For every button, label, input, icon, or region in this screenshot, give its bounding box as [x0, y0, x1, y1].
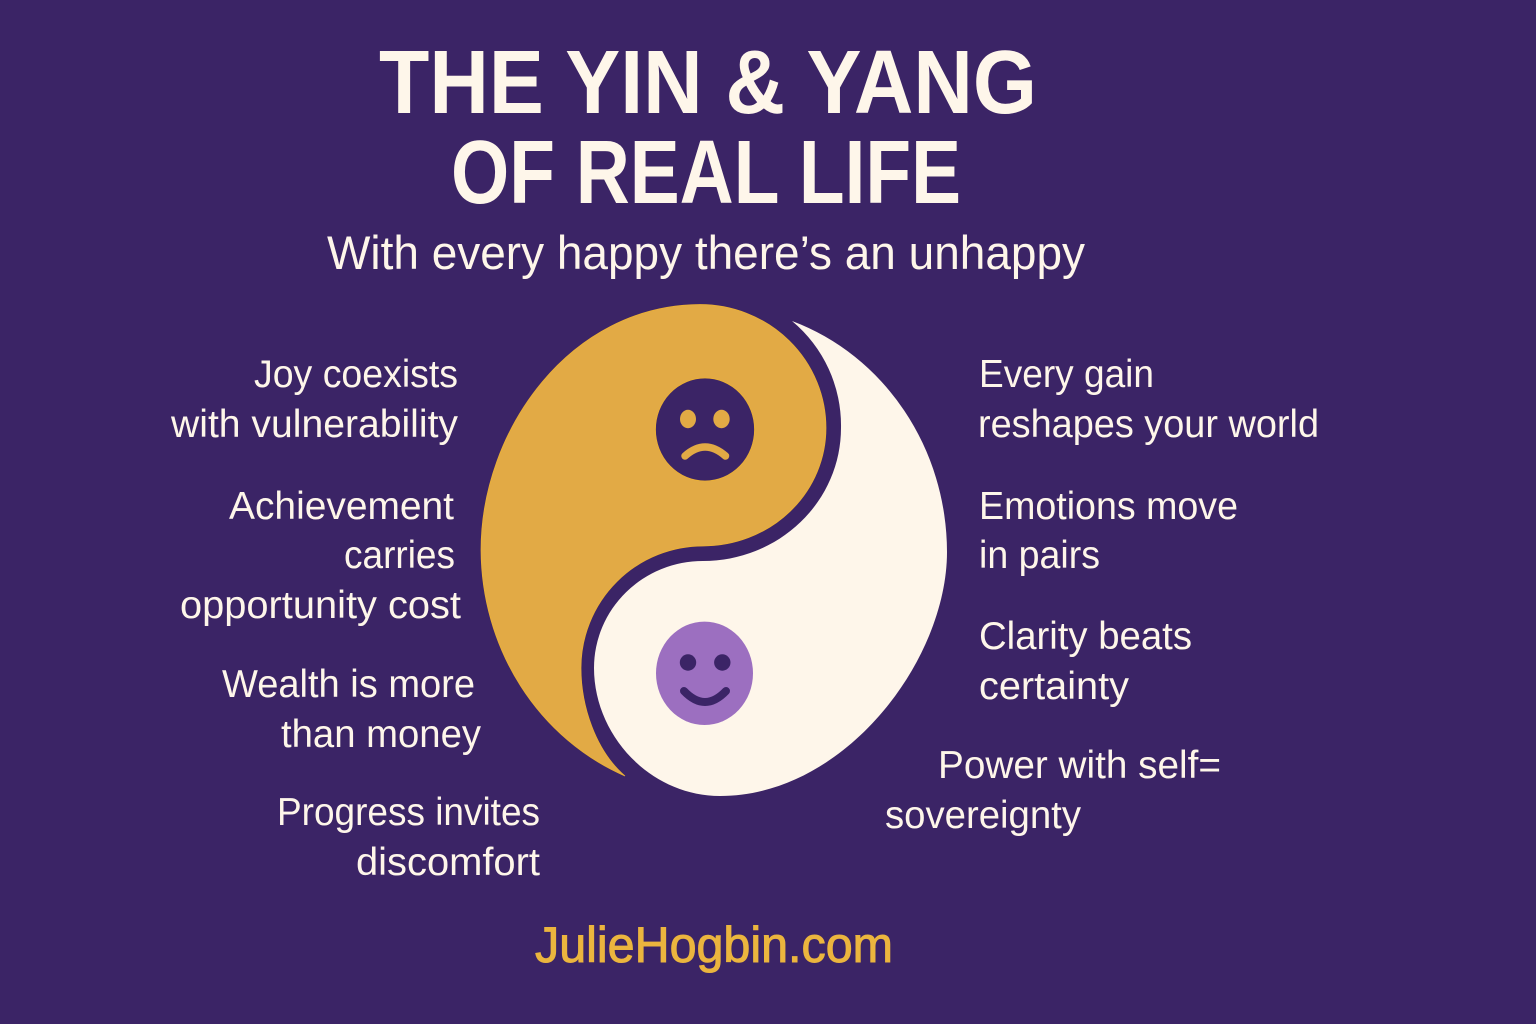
left text: achievement: [180, 485, 461, 627]
left text: progress: discomfort: [356, 841, 540, 884]
cream yang half: [594, 321, 947, 796]
right text: emotions: [979, 485, 1238, 577]
subtitle: With every happy there’s an unhappy: [327, 226, 1085, 279]
right text: emotions: Emotions move: [979, 485, 1238, 528]
left text: joy: Joy coexists: [254, 353, 458, 396]
left text: achievement: opportunity cost: [180, 584, 461, 627]
right text: emotions: in pairs: [979, 534, 1100, 577]
title: OF REAL LIFE: [451, 123, 961, 223]
right text: power: Power with self=: [938, 744, 1221, 787]
gold yin half: [481, 304, 826, 776]
right text: clarity: [979, 615, 1192, 708]
left text: wealth: [222, 663, 481, 756]
yin yang symbol: [481, 304, 947, 796]
left text: progress: Progress invites: [277, 791, 540, 834]
left text: joy: [170, 353, 458, 446]
right text: power: sovereignty: [885, 794, 1081, 837]
icon: sad face: [656, 378, 754, 481]
right text: gain: reshapes your world: [978, 403, 1319, 446]
left text: wealth: than money: [281, 713, 481, 756]
right text: gain: Every gain: [979, 353, 1154, 396]
left text: achievement: carries: [344, 534, 455, 577]
left text: wealth: Wealth is more: [222, 663, 475, 706]
right text: clarity: Clarity beats: [979, 615, 1192, 658]
title: THE YIN & YANG: [379, 33, 1037, 133]
left text: joy: with vulnerability: [170, 403, 458, 446]
left text: progress: [277, 791, 540, 884]
left text: achievement: Achievement: [229, 485, 454, 528]
right text: power: [885, 744, 1221, 837]
footer website: JulieHogbin.com: [535, 917, 893, 973]
right text: clarity: certainty: [979, 665, 1129, 708]
icon: happy face: [656, 622, 753, 725]
title: [379, 33, 1037, 223]
right text: gain: [978, 353, 1319, 446]
